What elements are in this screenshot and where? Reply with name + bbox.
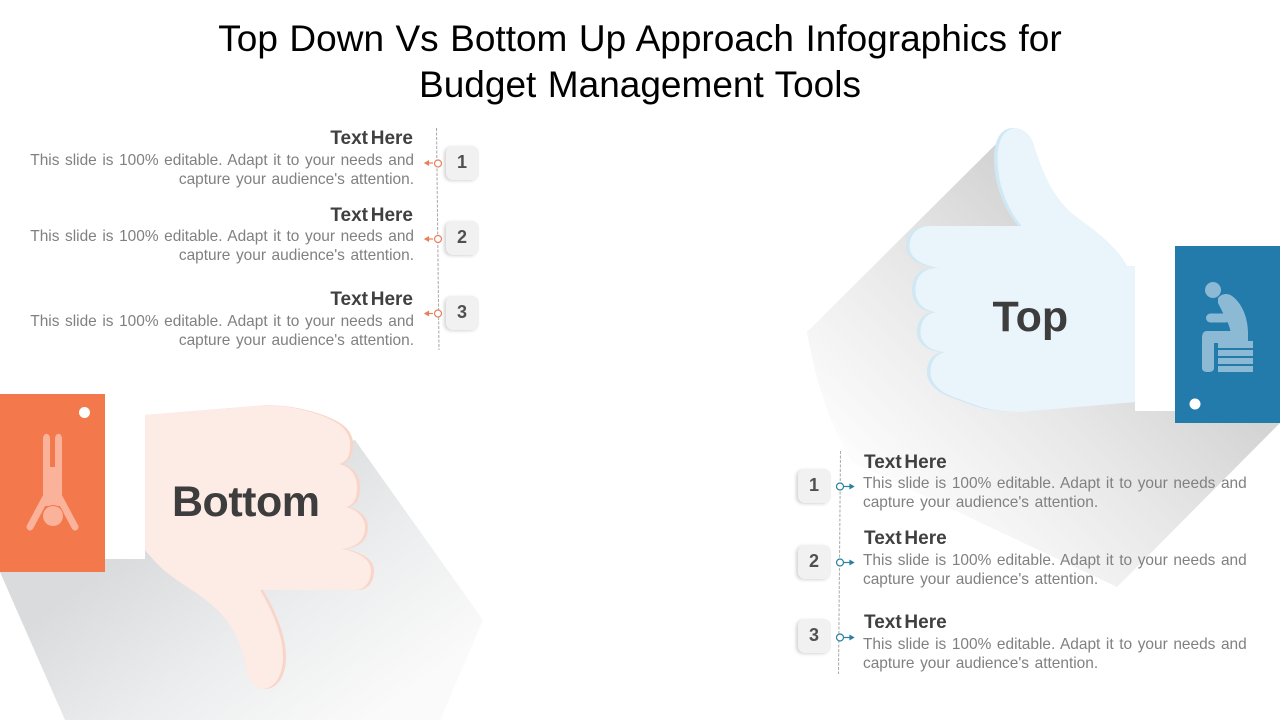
text: capture your audience's attention. bbox=[863, 655, 1098, 672]
text: 3 bbox=[809, 625, 819, 645]
left item 3 bbox=[30, 289, 479, 349]
hand label: top: Top bbox=[992, 292, 1068, 340]
text: capture your audience's attention. bbox=[179, 247, 414, 264]
text: capture your audience's attention. bbox=[179, 332, 414, 349]
divider right bbox=[838, 451, 840, 674]
text: This slide is 100% editable. Adapt it to your needs and bbox=[863, 552, 1247, 569]
title: Top Down Vs Bottom Up Approach Infographics for bbox=[218, 18, 1062, 59]
arrows right bbox=[836, 483, 854, 641]
cuff dot bbox=[79, 407, 90, 418]
text: capture your audience's attention. bbox=[863, 494, 1098, 511]
hand label: bottom: Bottom bbox=[172, 478, 319, 526]
right item 1 bbox=[794, 452, 1247, 511]
bottom cuff bbox=[0, 394, 105, 572]
hand fill bbox=[140, 405, 371, 689]
text: Text Here bbox=[330, 289, 413, 310]
long shadow: bottom hand bbox=[0, 440, 483, 720]
text: 2 bbox=[809, 551, 819, 571]
text: 3 bbox=[457, 302, 467, 322]
arrows left bbox=[425, 160, 442, 317]
right item 2 bbox=[794, 528, 1247, 588]
cuff dot bbox=[1190, 398, 1200, 410]
top cuff bbox=[1175, 246, 1280, 423]
top thumbs-up hand bbox=[906, 128, 1138, 412]
right item 3 bbox=[794, 612, 1247, 672]
left item 2 bbox=[30, 205, 479, 264]
text: This slide is 100% editable. Adapt it to your needs and bbox=[863, 475, 1247, 492]
text: 1 bbox=[809, 475, 819, 495]
text: Text Here bbox=[330, 128, 413, 149]
text: This slide is 100% editable. Adapt it to your needs and bbox=[30, 228, 414, 245]
text: This slide is 100% editable. Adapt it to your needs and bbox=[863, 636, 1247, 653]
hand outline shade bbox=[906, 128, 1135, 412]
text: 2 bbox=[457, 227, 467, 247]
text: This slide is 100% editable. Adapt it to your needs and bbox=[30, 152, 414, 169]
text: Text Here bbox=[864, 452, 947, 473]
divider left bbox=[436, 128, 439, 350]
text: This slide is 100% editable. Adapt it to your needs and bbox=[30, 313, 414, 330]
text: capture your audience's attention. bbox=[179, 171, 414, 188]
text: 1 bbox=[457, 152, 467, 172]
long shadow: top hand bbox=[807, 140, 1280, 587]
bottom thumbs-down hand bbox=[140, 405, 374, 689]
left item 1 bbox=[30, 128, 479, 188]
icon: person doing headstand bbox=[30, 434, 75, 527]
title: Budget Management Tools bbox=[419, 64, 861, 105]
hand fill bbox=[910, 128, 1138, 412]
title bbox=[218, 18, 1062, 105]
hand outline shade bbox=[145, 405, 374, 689]
text: Text Here bbox=[330, 205, 413, 226]
text: Text Here bbox=[864, 612, 947, 633]
text: capture your audience's attention. bbox=[863, 571, 1098, 588]
text: Text Here bbox=[864, 528, 947, 549]
icon: person sitting on stack bbox=[1202, 282, 1253, 372]
